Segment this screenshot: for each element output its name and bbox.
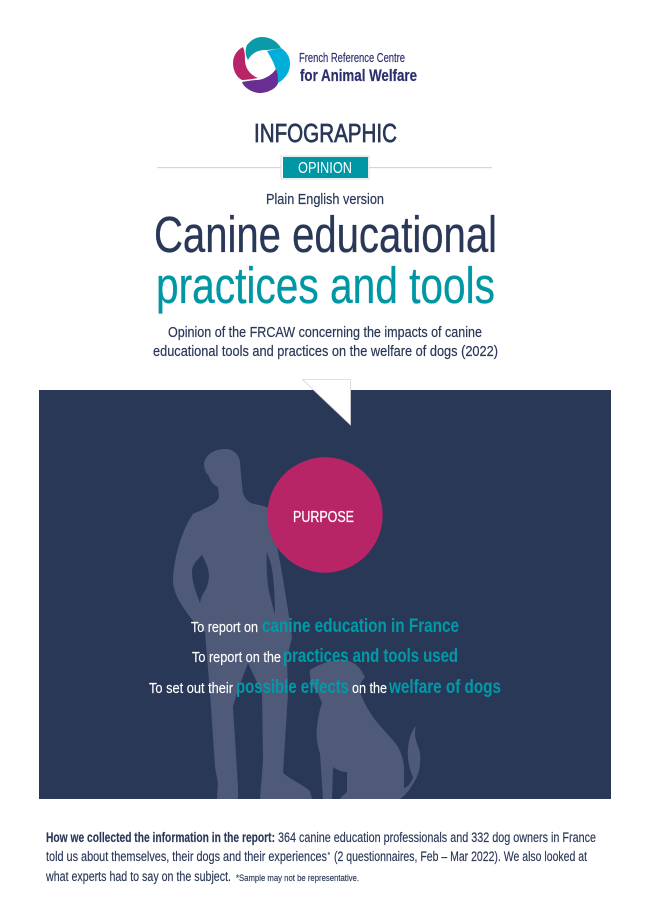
title (154, 206, 497, 314)
title: practices and tools (156, 257, 495, 314)
logo (233, 37, 417, 93)
opinion banner: OPINION (298, 160, 352, 177)
method note: (2 questionnaires, Feb – Mar 2022). We also looked at (334, 849, 587, 864)
intro text: Opinion of the FRCAW concerning the impacts of canine (168, 324, 482, 341)
title: Canine educational (154, 206, 497, 263)
silhouette: person (173, 449, 312, 799)
purpose statement 1: canine education in France (262, 615, 459, 637)
subtitle: plain English version: Plain English version (266, 191, 384, 208)
intro text: educational tools and practices on the welfare of dogs (2022) (153, 343, 498, 360)
method note: *Sample may not be representative. (236, 873, 359, 883)
silhouette: dog (310, 660, 420, 799)
logo text: organisation name (299, 51, 417, 85)
logo text: organisation name: French Reference Centre (299, 51, 405, 65)
purpose statement 2 (192, 645, 458, 667)
method note: told us about themselves, their dogs and their experiences (46, 849, 327, 864)
purpose statement 1 (191, 615, 459, 637)
purpose statement 1: To report on (191, 620, 258, 636)
method note: How we collected the information in the report: (46, 830, 275, 845)
intro text (153, 324, 498, 360)
purpose statement 3 (149, 676, 501, 698)
method note: * (328, 852, 330, 859)
opinion banner (157, 156, 492, 179)
purpose statement 3: on the (352, 681, 387, 697)
purpose statement 2: practices and tools used (283, 645, 458, 667)
method note (45, 830, 596, 884)
pointer triangle (302, 380, 350, 425)
purpose statement 3: welfare of dogs (388, 676, 501, 698)
purpose statement 2: To report on the (192, 650, 281, 666)
heading: infographic: INFOGRAPHIC (254, 120, 397, 148)
purpose statement 3: To set out their (149, 681, 233, 697)
method note: what experts had to say on the subject. (45, 869, 231, 884)
logo text: organisation name: for Animal Welfare (300, 67, 417, 85)
purpose statement 3: possible effects (236, 676, 349, 698)
purpose circle (267, 457, 383, 573)
icon: four-petal ring (233, 37, 290, 93)
purpose circle: PURPOSE (293, 509, 354, 526)
panel: purpose (39, 380, 611, 799)
